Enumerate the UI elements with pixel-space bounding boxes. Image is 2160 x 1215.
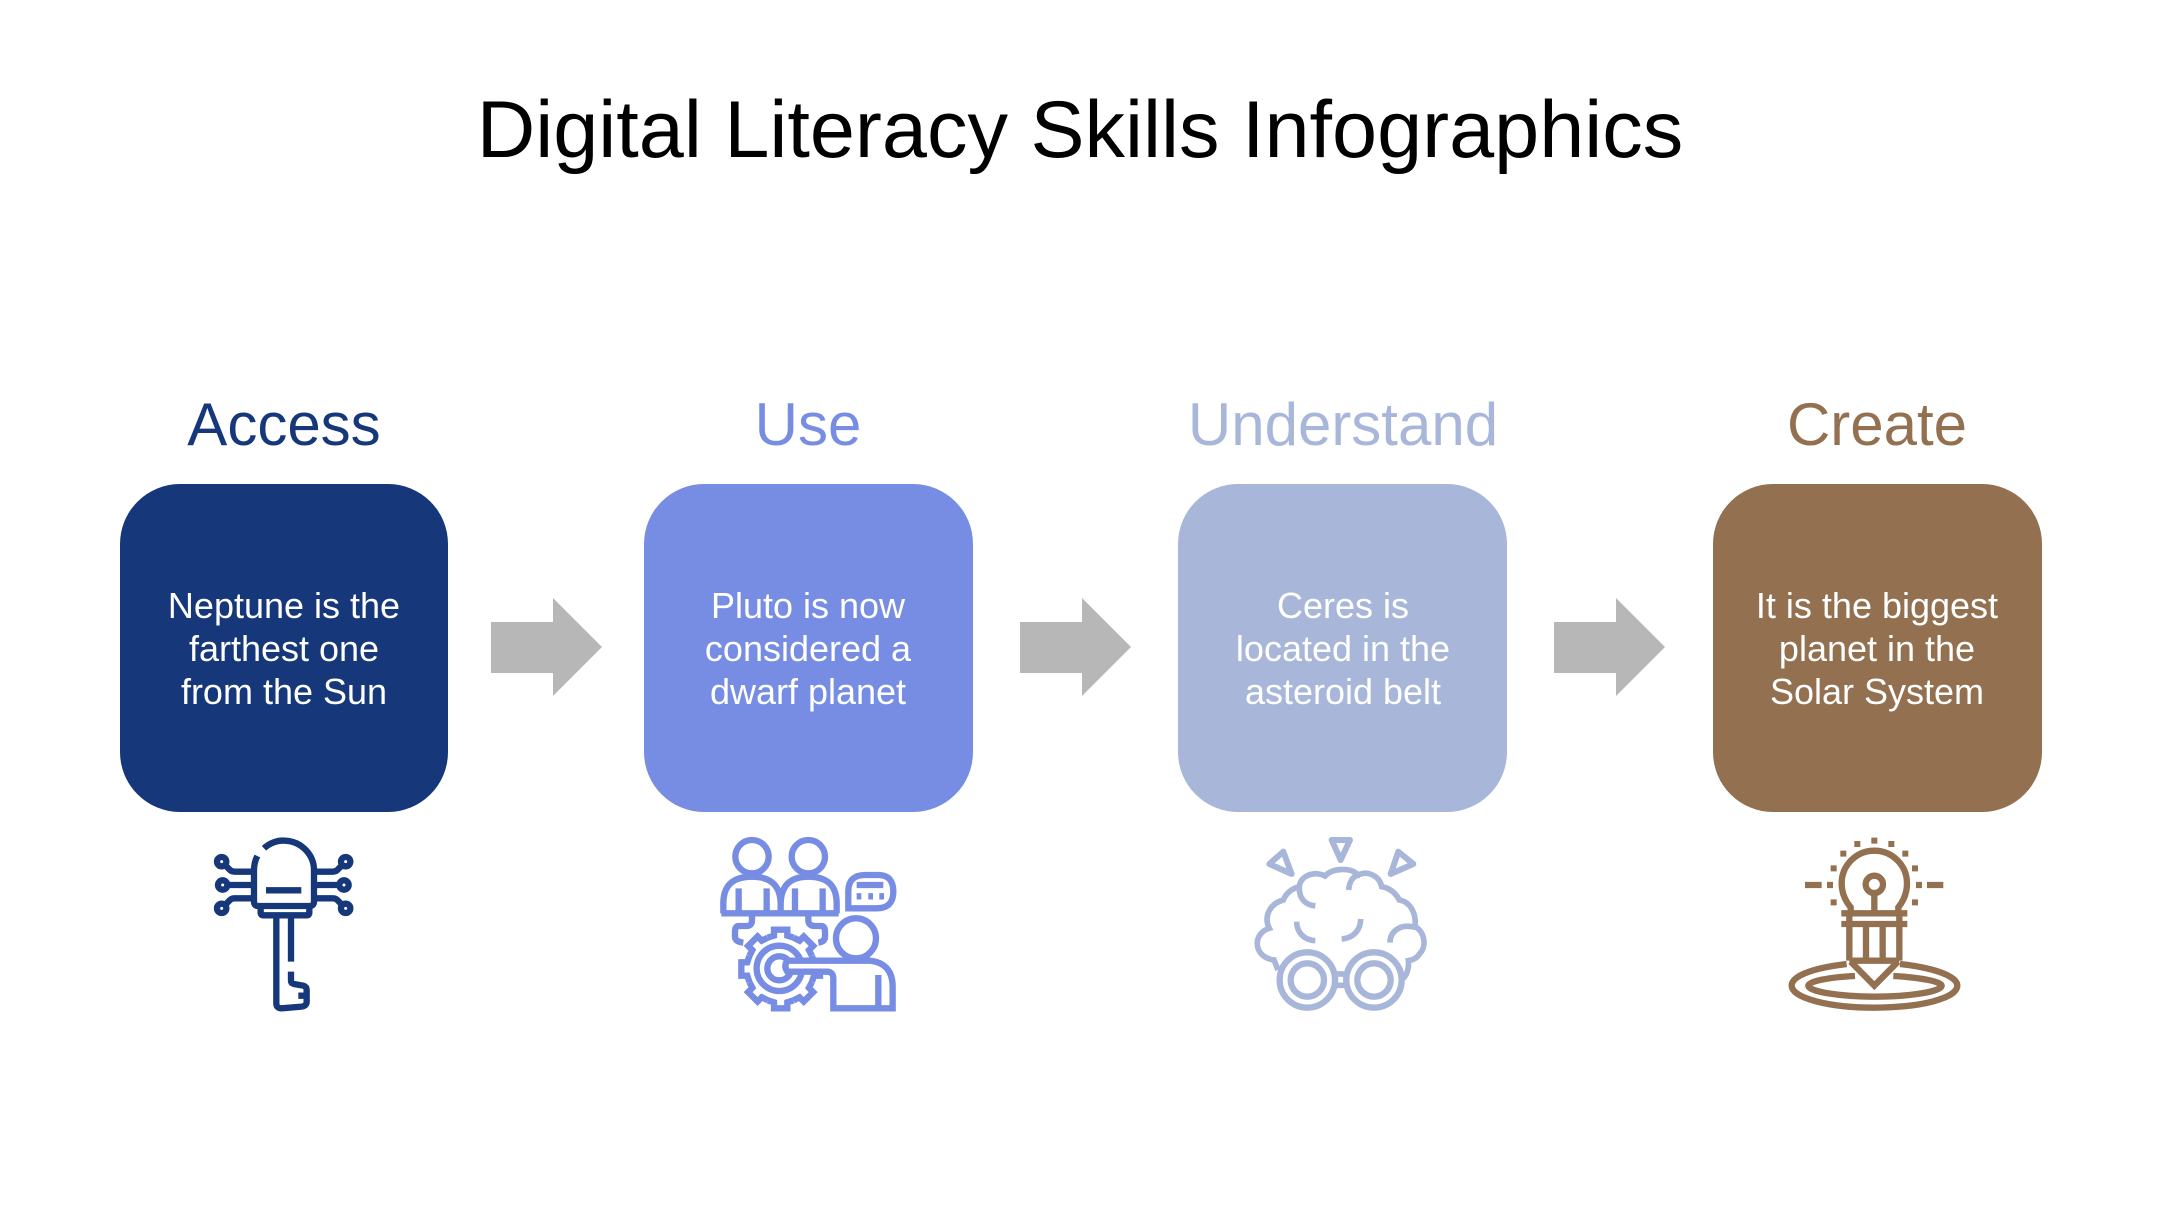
card: Use: Pluto is now xyxy=(711,585,906,626)
heading: Understand: Understand xyxy=(1188,391,1498,458)
card: Understand: Ceres is xyxy=(1277,585,1409,626)
panel: Create xyxy=(1713,391,2042,1008)
arrow 2 xyxy=(1020,598,1131,696)
icon: light bulb pencil xyxy=(1792,841,1957,1008)
card: Access xyxy=(120,484,448,812)
card: Create: planet in the xyxy=(1779,628,1975,669)
panel: Use xyxy=(644,391,973,1008)
arrow 3 xyxy=(1554,598,1665,696)
card: Use: considered a xyxy=(705,628,912,669)
icon: people and gear xyxy=(721,840,893,1008)
title: Digital Literacy Skills Infographics xyxy=(477,85,1683,175)
card: Access: Neptune is the xyxy=(168,585,400,626)
heading: Use: Use xyxy=(755,391,861,458)
icon: brain with glasses xyxy=(1257,840,1424,1008)
card: Understand xyxy=(1178,484,1507,812)
icon: digital key xyxy=(217,841,350,1008)
card: Understand: asteroid belt xyxy=(1245,671,1441,712)
arrow 1 xyxy=(491,598,602,696)
card: Use: dwarf planet xyxy=(710,671,906,712)
card: Access: from the Sun xyxy=(181,671,387,712)
card: Create: Solar System xyxy=(1770,671,1984,712)
card: Create: It is the biggest xyxy=(1756,585,1998,626)
card: Create xyxy=(1713,484,2042,812)
card: Use xyxy=(644,484,973,812)
card: Understand: located in the xyxy=(1236,628,1450,669)
heading: Create: Create xyxy=(1787,391,1967,458)
panel: Understand xyxy=(1178,391,1507,1008)
card: Access: farthest one xyxy=(189,628,379,669)
panel: Access xyxy=(120,391,448,1008)
heading: Access: Access xyxy=(187,391,381,458)
